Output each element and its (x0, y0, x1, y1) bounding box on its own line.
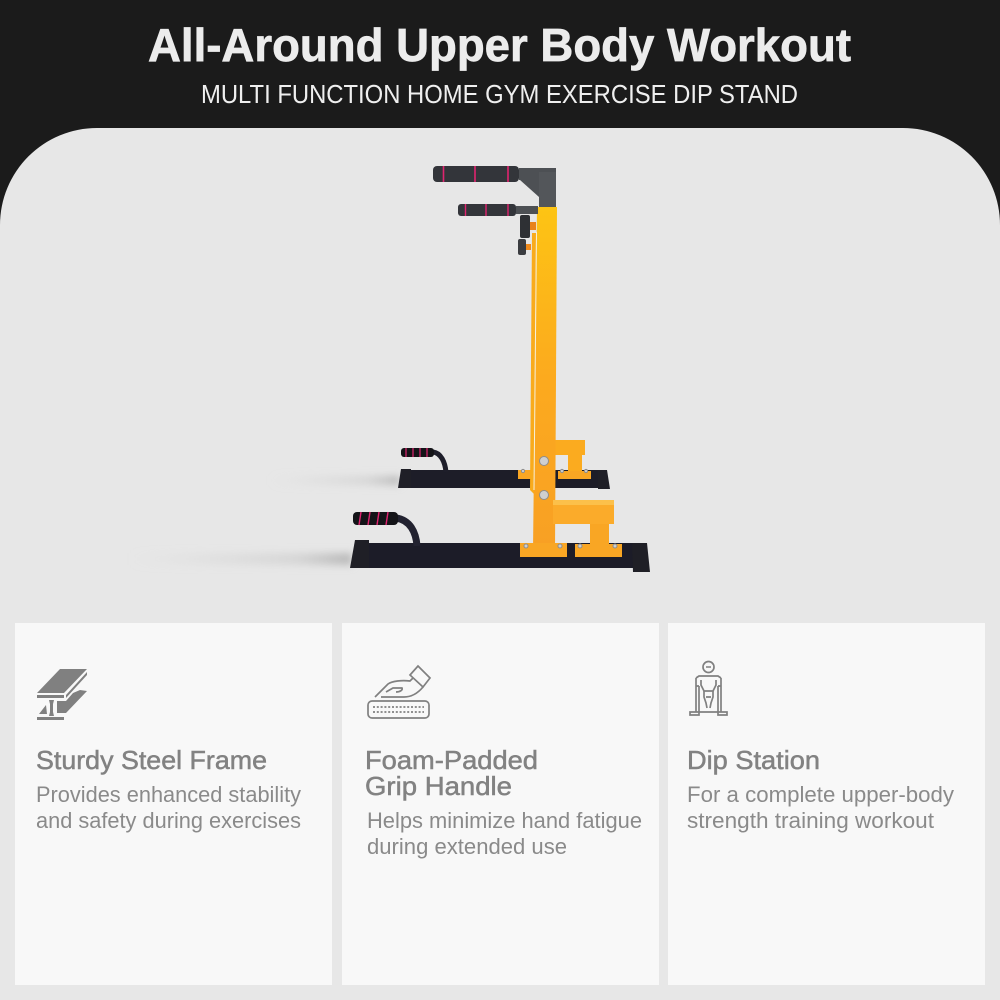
rear floor handle (401, 448, 446, 472)
description: Provides enhanced stability (36, 782, 301, 807)
heading: Sturdy Steel Frame (36, 745, 267, 775)
description (367, 808, 642, 859)
rear upright post (530, 233, 536, 494)
description: strength training workout (687, 808, 934, 833)
subtitle: MULTI FUNCTION HOME GYM EXERCISE DIP STAND (201, 79, 798, 109)
description: during extended use (367, 834, 567, 859)
heading: Grip Handle (365, 771, 512, 801)
description: Helps minimize hand fatigue (367, 808, 642, 833)
adjustment knobs (518, 215, 536, 255)
description (36, 782, 301, 833)
panel: dip station card (668, 623, 985, 985)
header band (0, 0, 1000, 260)
heading: Foam-Padded (365, 745, 538, 775)
front floor handle (353, 512, 417, 546)
icon: steel beam (37, 669, 87, 720)
description: and safety during exercises (36, 808, 301, 833)
rear base bar (398, 469, 610, 489)
front base bar (350, 540, 650, 572)
top handle (433, 166, 556, 207)
panel: steel frame card (15, 623, 332, 985)
heading: Dip Station (687, 745, 820, 775)
bolts (521, 456, 617, 548)
title: All-Around Upper Body Workout (148, 19, 851, 71)
floor shadows (130, 476, 400, 565)
second handle (458, 204, 538, 216)
product: dip stand (350, 166, 650, 572)
main upright post (533, 207, 557, 550)
rear orange step (518, 440, 591, 479)
icon: hand on foam (368, 666, 430, 718)
description: For a complete upper-body (687, 782, 954, 807)
panel: grip handle card (342, 623, 659, 985)
icon: dip figure (690, 662, 727, 715)
front orange step (520, 500, 622, 557)
heading (365, 745, 538, 801)
description (687, 782, 954, 833)
